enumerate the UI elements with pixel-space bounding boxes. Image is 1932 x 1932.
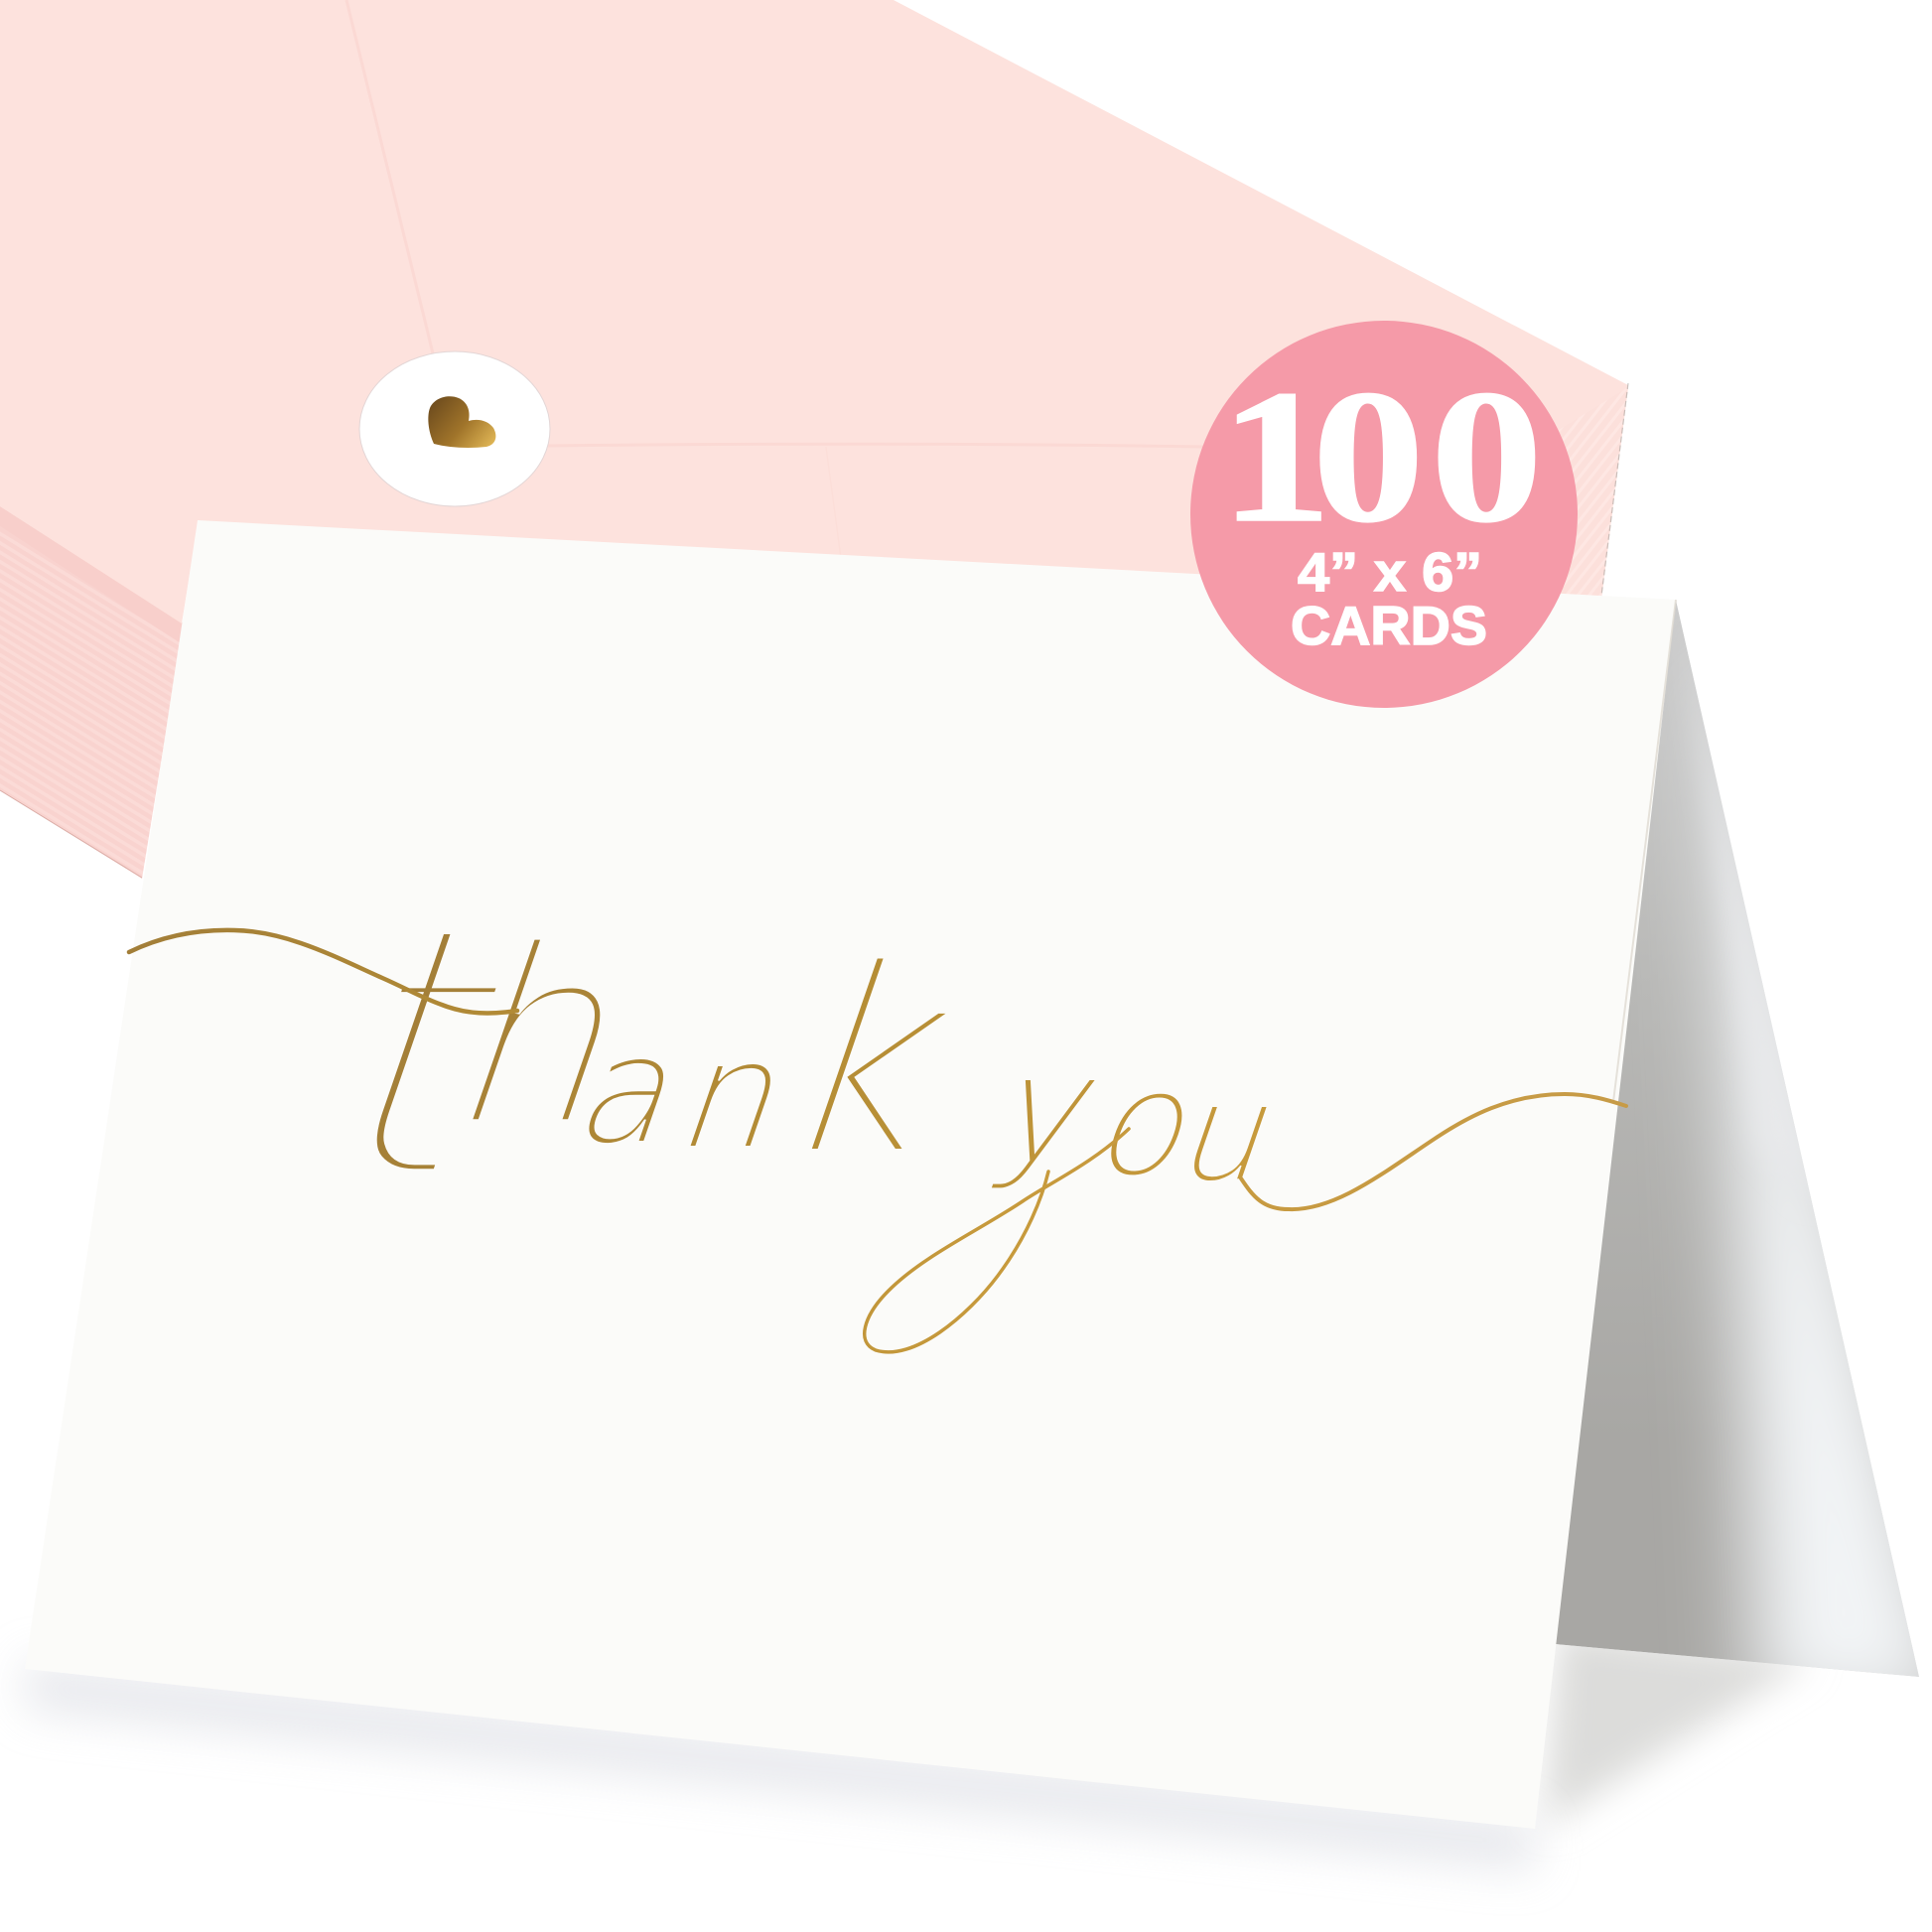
script text: a (558, 1005, 708, 1177)
card front (25, 520, 1676, 1829)
envelope flap fold lines (346, 0, 1206, 566)
envelope stack side (0, 506, 184, 879)
envelope corner stack (1545, 387, 1628, 600)
icon: gold heart (428, 396, 495, 448)
badge size text: 4” x 6” (1298, 541, 1482, 603)
badge: 100 cards (1190, 321, 1578, 708)
flourish: entry swash (129, 930, 517, 1013)
envelope front (0, 0, 1628, 623)
card back panel (1544, 600, 1932, 1718)
heart sticker (359, 351, 550, 506)
script text: n (660, 1010, 814, 1182)
script text: h (422, 897, 673, 1179)
script text: t (289, 851, 564, 1256)
script text: o (1077, 1040, 1223, 1208)
shadow under card front (25, 1660, 1535, 1871)
surface shadow beneath open card (1544, 1628, 1812, 1827)
thank you script lettering (129, 851, 1626, 1352)
script text: k (746, 913, 999, 1213)
badge number: 100 (1219, 351, 1543, 562)
script text: u (1162, 1055, 1301, 1211)
script text: y (976, 1024, 1124, 1196)
badge cards text: CARDS (1291, 595, 1487, 656)
flourish: y descender loop (865, 1129, 1129, 1352)
flourish: exit swash (1241, 1094, 1626, 1209)
